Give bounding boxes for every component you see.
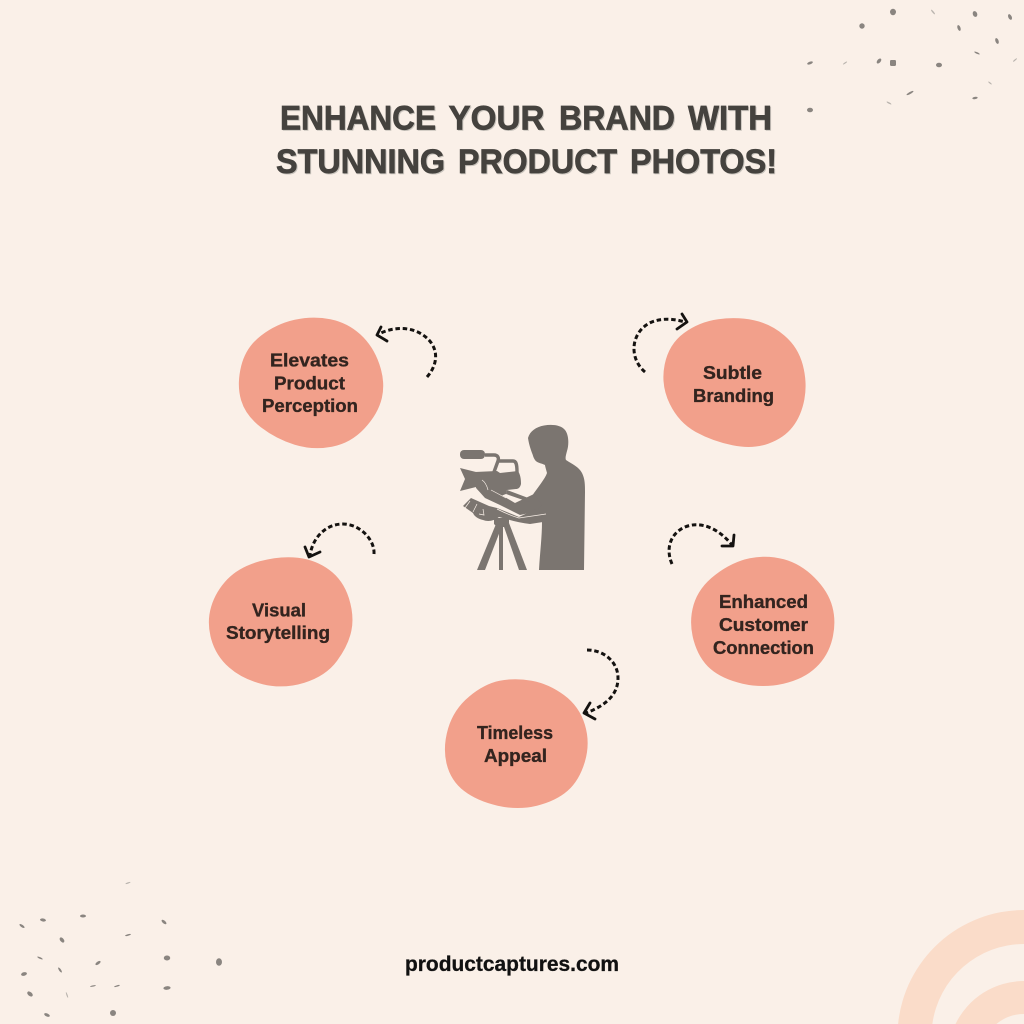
label bbox=[262, 350, 358, 416]
title: YOUR bbox=[448, 99, 544, 137]
panel: Timeless Appeal bbox=[445, 679, 588, 808]
camera lens hood bbox=[460, 468, 476, 491]
blob bbox=[239, 318, 383, 448]
label: Appeal bbox=[484, 745, 547, 766]
title: BRAND bbox=[560, 100, 676, 138]
tripod legs bbox=[477, 524, 502, 570]
label: Product bbox=[274, 373, 345, 394]
blob bbox=[691, 557, 834, 686]
panel: Subtle Branding bbox=[663, 318, 806, 447]
blob bbox=[445, 679, 588, 808]
camera body bbox=[475, 471, 521, 497]
arrow: to Enhanced Customer Connection bbox=[669, 525, 734, 564]
footer website: productcaptures.com bbox=[405, 953, 619, 976]
label: Branding bbox=[693, 385, 774, 406]
label: Connection bbox=[713, 637, 814, 658]
blob bbox=[663, 318, 806, 447]
label bbox=[713, 591, 814, 658]
title: PHOTOS! bbox=[630, 143, 777, 181]
title: PRODUCT bbox=[459, 144, 618, 182]
title: BRAND bbox=[559, 99, 675, 137]
camera shoulder rod bbox=[506, 490, 531, 502]
label: Elevates bbox=[270, 350, 349, 371]
lens-side arm and hand bbox=[463, 498, 543, 524]
label bbox=[693, 362, 774, 406]
panel: Elevates Product Perception bbox=[239, 318, 383, 448]
blob bbox=[209, 557, 352, 686]
camera top handle bbox=[485, 455, 517, 472]
label: Timeless bbox=[477, 722, 553, 743]
label bbox=[226, 600, 330, 643]
arrow: to Subtle Branding bbox=[634, 314, 687, 372]
panel: Visual Storytelling bbox=[209, 557, 352, 686]
title bbox=[276, 99, 778, 182]
decorative speckles: bottom left bbox=[19, 882, 222, 1018]
panel: Enhanced Customer Connection bbox=[691, 557, 834, 686]
label: Customer bbox=[719, 614, 808, 635]
title: STUNNING bbox=[277, 144, 446, 182]
title: WITH bbox=[688, 99, 772, 137]
decorative concentric arcs: bottom right bbox=[898, 910, 1024, 1024]
label: Subtle bbox=[703, 362, 762, 383]
arrow: to Timeless Appeal bbox=[584, 650, 618, 719]
decorative speckles: top right bbox=[807, 9, 1017, 112]
label: Storytelling bbox=[226, 622, 330, 643]
camera-side arm bbox=[477, 478, 542, 515]
title: ENHANCE bbox=[281, 100, 437, 138]
title: WITH bbox=[689, 100, 773, 138]
central icon: videographer silhouette with camera on tripod bbox=[460, 425, 585, 570]
arrow: to Elevates Product Perception bbox=[377, 327, 436, 377]
label bbox=[477, 722, 553, 766]
label: Visual bbox=[252, 600, 306, 621]
title: YOUR bbox=[450, 100, 546, 138]
title: PRODUCT bbox=[458, 143, 617, 181]
tripod head bbox=[494, 518, 509, 527]
arrow: to Visual Storytelling bbox=[305, 524, 374, 557]
label: Enhanced bbox=[719, 591, 808, 612]
title: STUNNING bbox=[276, 143, 445, 181]
label: Perception bbox=[262, 395, 358, 416]
title: ENHANCE bbox=[280, 99, 436, 137]
title: PHOTOS! bbox=[631, 144, 778, 182]
man's body and head bbox=[528, 425, 585, 570]
camera microphone bbox=[460, 450, 485, 459]
highlight lines bbox=[497, 509, 546, 518]
